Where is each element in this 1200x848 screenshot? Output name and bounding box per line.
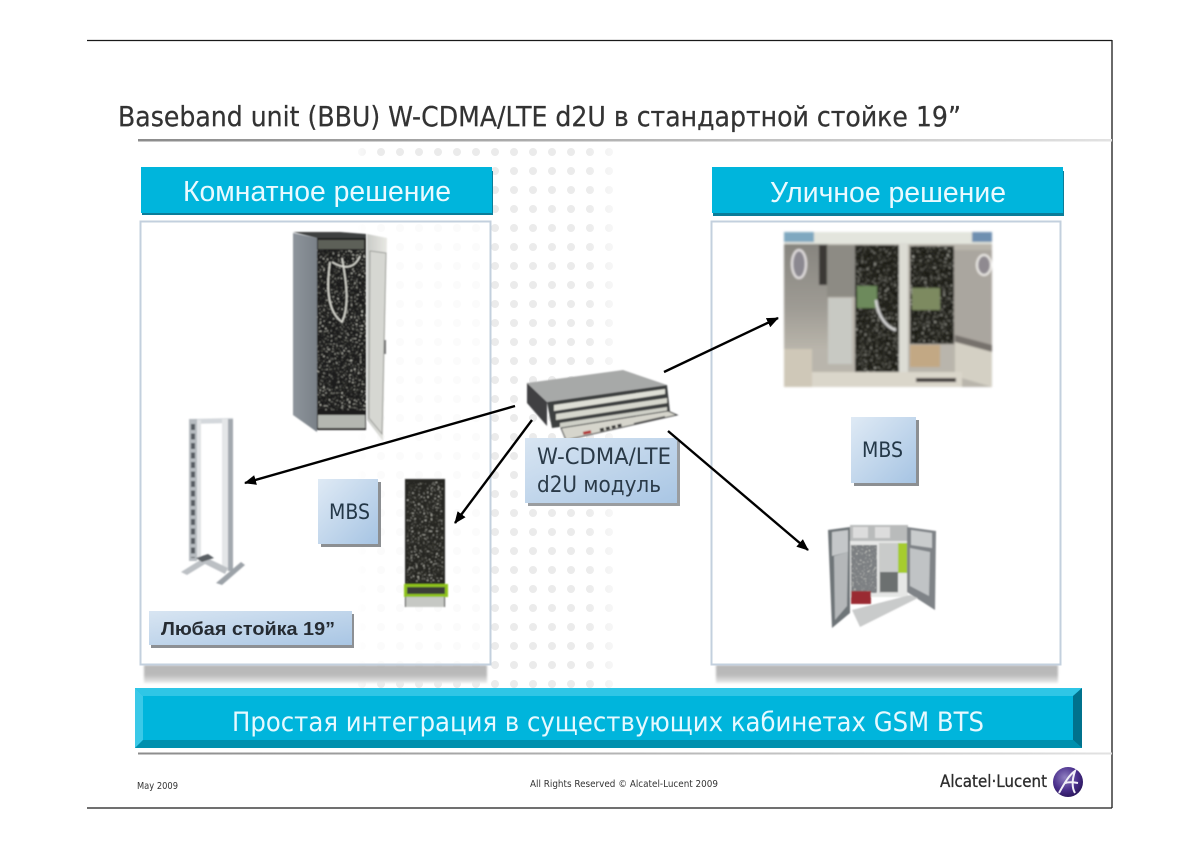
title: Baseband unit (BBU) W-CDMA/LTE d2U в стандартной стойке 19” bbox=[118, 101, 961, 133]
dotted background texture bbox=[352, 143, 618, 688]
banner: easy integration bbox=[135, 688, 1082, 748]
title rule bbox=[138, 139, 1112, 142]
panel box bbox=[712, 222, 1060, 664]
MBS box: indoor bbox=[318, 479, 381, 547]
logo: Alcatel-Lucent: Alcatel·Lucent bbox=[940, 772, 1047, 792]
icon: W-CDMA/LTE d2U module bbox=[527, 370, 677, 440]
icon: outdoor cabinet photo bbox=[784, 232, 992, 387]
label: module name bbox=[525, 438, 680, 506]
label: module name: W-CDMA/LTE bbox=[537, 445, 671, 470]
icon: open 19-inch rack bbox=[181, 418, 245, 585]
icon: outdoor cabinet with open doors bbox=[828, 525, 936, 628]
arrow: module to open rack bbox=[245, 406, 515, 483]
arrow: module to indoor cabinet bbox=[455, 420, 532, 523]
MBS box: outdoor bbox=[851, 417, 919, 486]
icon: cabinet front with highlighted BBU slot bbox=[405, 479, 446, 607]
banner: easy integration: Простая интеграция в существующих кабинетах GSM BTS bbox=[232, 707, 984, 738]
heading: indoor bbox=[141, 167, 493, 215]
footer: date: May 2009 bbox=[137, 781, 178, 792]
panel box bbox=[140, 222, 490, 664]
panel: outdoor solution bbox=[712, 167, 1064, 683]
heading: indoor: Комнатное решение bbox=[183, 176, 451, 208]
panel shadow bbox=[144, 665, 487, 683]
panel shadow bbox=[716, 665, 1058, 683]
arrow: module to outdoor cabinet bbox=[668, 431, 808, 550]
logo: Alcatel-Lucent bbox=[940, 767, 1083, 797]
arrow: module to outdoor cabinet photo bbox=[664, 318, 778, 372]
heading: outdoor: Уличное решение bbox=[770, 177, 1006, 209]
footer rule bbox=[138, 752, 1112, 754]
panel: indoor solution bbox=[140, 167, 493, 683]
heading: outdoor bbox=[712, 167, 1064, 216]
label: any 19-inch rack: Любая стойка 19” bbox=[161, 618, 335, 639]
label: module name: d2U модуль bbox=[537, 473, 661, 498]
label: any 19-inch rack bbox=[149, 611, 354, 648]
footer: copyright: All Rights Reserved © Alcatel-Lucent 2009 bbox=[530, 779, 718, 790]
slide frame bbox=[87, 40, 1112, 808]
MBS box: outdoor: MBS bbox=[862, 438, 903, 463]
icon: indoor cabinet with open door bbox=[293, 232, 387, 441]
MBS box: indoor: MBS bbox=[329, 500, 370, 525]
